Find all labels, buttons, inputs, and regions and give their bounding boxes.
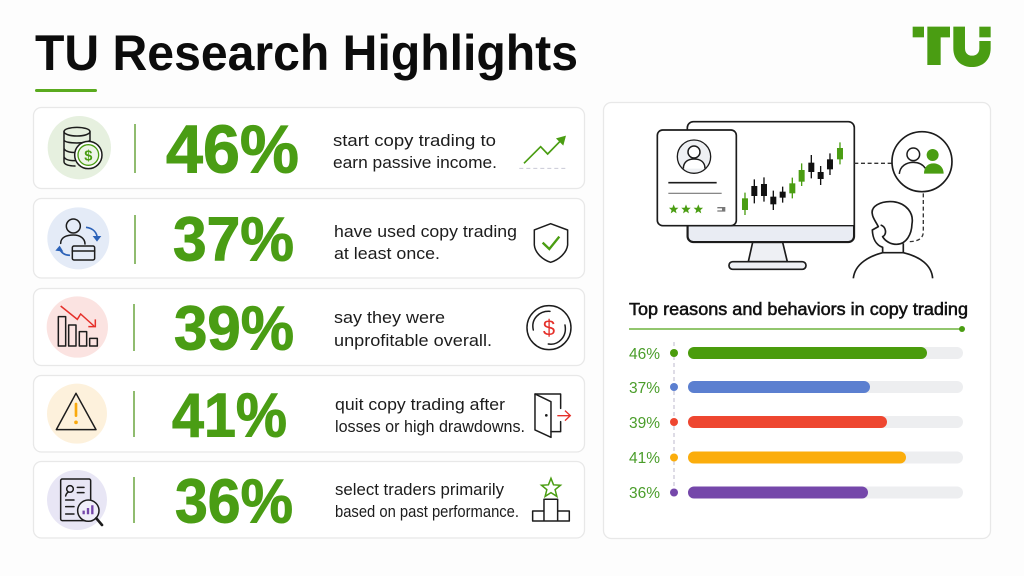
description: 37%: have used copy trading xyxy=(334,222,517,241)
description: 37% xyxy=(334,222,517,263)
bar: 37%: 37% xyxy=(629,380,660,397)
description: 46%: start copy trading to xyxy=(333,131,496,150)
description: 39%: say they were xyxy=(334,308,445,327)
card: 37% have used copy trading xyxy=(34,198,584,278)
icon: rising line xyxy=(519,136,568,168)
icon: warning triangle xyxy=(47,384,107,444)
icon: dollar coin xyxy=(527,306,571,350)
bar: 41% xyxy=(629,450,963,467)
icon: falling bars xyxy=(47,296,108,358)
icon: user and card xyxy=(47,207,109,269)
candlestick chart xyxy=(742,142,843,215)
icon: coins xyxy=(48,116,111,179)
panel: illustration and chart xyxy=(604,102,990,538)
illustration: trader copying at monitor xyxy=(657,122,952,278)
connector lines xyxy=(854,163,923,242)
description: 41%: quit copy trading after xyxy=(335,395,505,414)
title: TU Research Highlights xyxy=(35,25,578,81)
chart heading xyxy=(629,299,968,332)
description: 36%: select traders primarily xyxy=(335,480,504,499)
description: 37%: at least once. xyxy=(334,244,440,263)
icon: coins: $ xyxy=(84,148,92,164)
bar: 36% xyxy=(629,485,963,502)
bar chart xyxy=(629,342,963,502)
bar: 37% xyxy=(629,380,963,397)
bar: 46% xyxy=(629,346,963,363)
monitor xyxy=(687,122,854,269)
bar: 46%: 46% xyxy=(629,346,660,363)
chart heading: Top reasons and behaviors in copy trading xyxy=(629,299,968,319)
description: 41% xyxy=(335,395,525,436)
icon: exit door xyxy=(535,394,570,437)
description: 36%: based on past performance. xyxy=(335,502,519,521)
stat: 46%: 46% xyxy=(166,112,299,188)
card: 39% unprofitable xyxy=(34,288,584,366)
description: 41%: losses or high drawdowns. xyxy=(335,417,525,436)
icon: podium and star xyxy=(533,478,569,521)
stat: 37%: 37% xyxy=(173,206,294,274)
description: 39%: unprofitable overall. xyxy=(334,331,492,350)
card: 36% select traders xyxy=(34,462,584,538)
profile card xyxy=(657,130,736,226)
person xyxy=(853,202,933,278)
icon: shield check xyxy=(534,224,568,262)
description: 36% xyxy=(335,480,519,521)
bar: 39%: 39% xyxy=(629,415,660,432)
users circle xyxy=(892,132,952,192)
stat: 41%: 41% xyxy=(172,382,287,450)
card: 46% start copy trading xyxy=(34,108,584,188)
stat: 39%: 39% xyxy=(174,294,294,364)
stat: 36%: 36% xyxy=(175,468,293,536)
bar: 41%: 41% xyxy=(629,450,660,467)
description: 39% xyxy=(334,308,492,350)
icon: dollar coin: $ xyxy=(543,316,555,341)
logo: TU xyxy=(913,27,991,67)
bar: 36%: 36% xyxy=(629,485,660,502)
icon: document and magnifier xyxy=(47,470,107,530)
description: 46% xyxy=(333,131,497,172)
description: 46%: earn passive income. xyxy=(333,153,497,172)
card: 41% quit xyxy=(34,376,584,452)
bar: 39% xyxy=(629,415,963,432)
